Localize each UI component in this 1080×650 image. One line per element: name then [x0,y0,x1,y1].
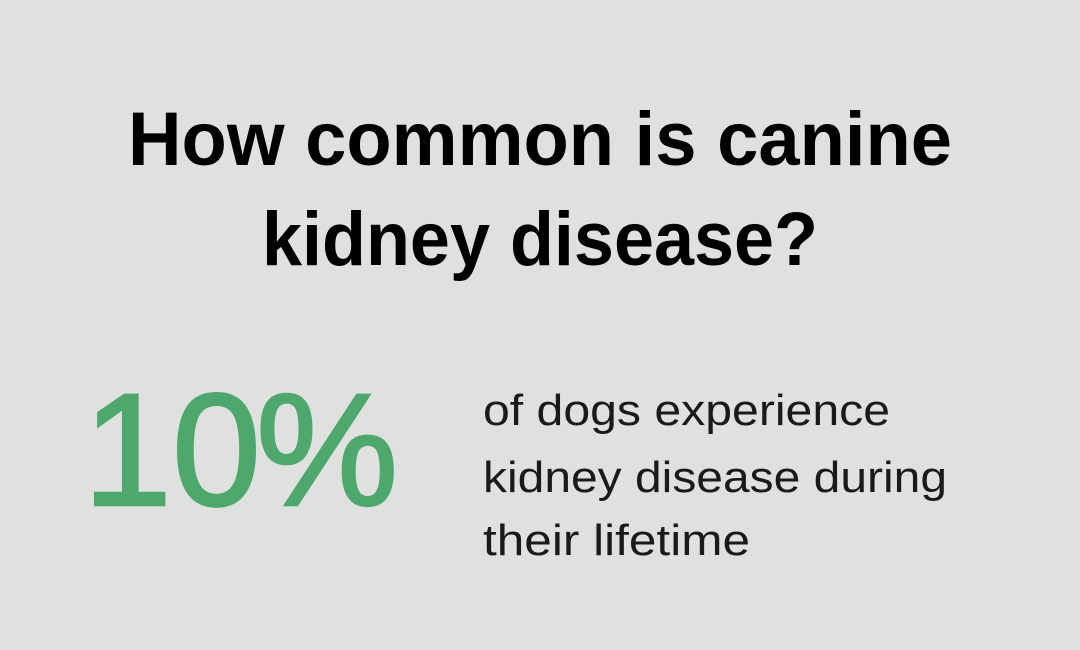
title: kidney disease? [262,197,818,282]
title: How common is canine [128,97,952,182]
description text: kidney disease during [483,453,947,502]
description text: their lifetime [483,516,750,565]
big statistic: 10%: % [256,360,398,539]
title [128,97,952,282]
big statistic: 10%: 1 [83,360,172,539]
big statistic: 10%: 0 [172,360,261,539]
description text [483,386,947,565]
description text: of dogs experience [483,386,890,435]
